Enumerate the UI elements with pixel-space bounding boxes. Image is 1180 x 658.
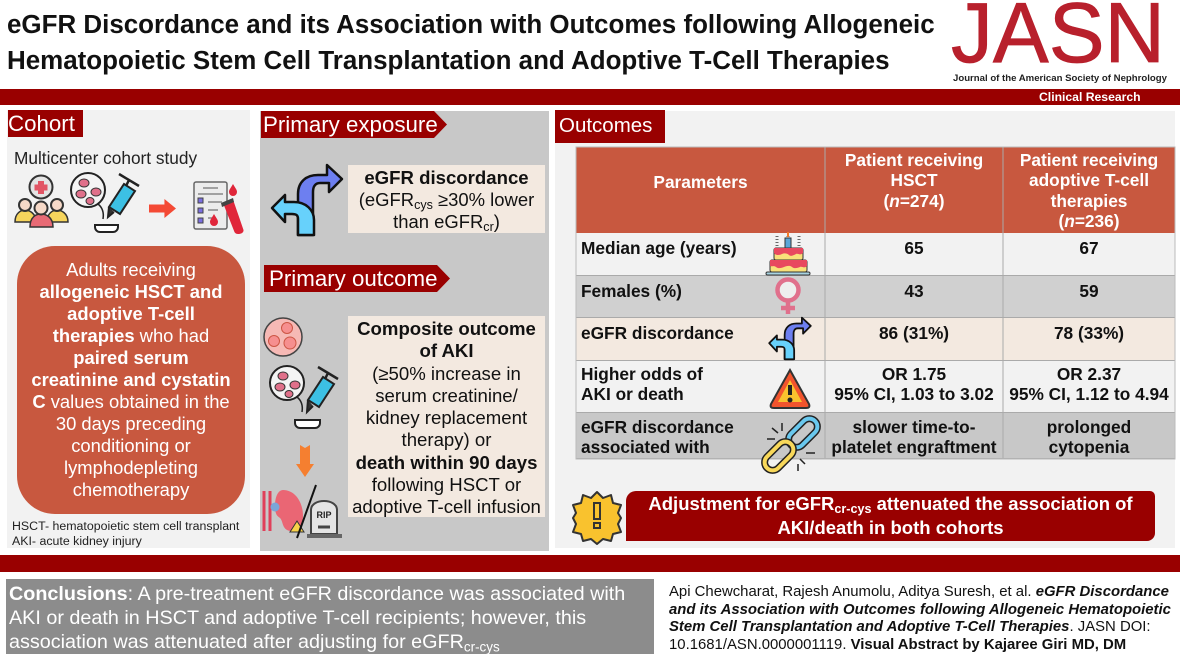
callout: eligibility: chemotherapy xyxy=(73,479,189,500)
text box: composite outcome: of AKI xyxy=(419,340,474,361)
arrow: cohort to labs xyxy=(149,199,176,218)
row: higher odds: 95% CI, 1.03 to 3.02 xyxy=(834,384,994,404)
row: higher odds: 95% CI, 1.12 to 4.94 xyxy=(1009,384,1169,404)
row: associated with: platelet engraftment xyxy=(831,437,997,457)
citation: and its Association with Outcomes following Allogeneic Hematopoietic xyxy=(669,602,1171,618)
heading: primary exposure: Primary exposure xyxy=(263,112,438,137)
icon: cells and syringe xyxy=(70,172,140,233)
row: associated with: prolonged xyxy=(1047,417,1131,437)
table header: Patient receiving xyxy=(1020,150,1158,170)
icon: diverging arrows small xyxy=(768,316,812,360)
row: associated with: eGFR discordance xyxy=(581,417,734,437)
text box: composite outcome: serum creatinine/ xyxy=(375,385,518,406)
row: eGFR discordance: 78 (33%) xyxy=(1054,323,1124,343)
table header: HSCT xyxy=(890,170,938,190)
text box: composite outcome: following HSCT or xyxy=(372,474,521,495)
text box: eGFR discordance: eGFR discordance xyxy=(364,167,529,188)
row: associated with: slower time-to- xyxy=(853,417,975,437)
citation: Api Chewcharat, Rajesh Anumolu, Aditya Suresh, et al. eGFR Discordance xyxy=(669,584,1169,600)
callout: eligibility: C values obtained in the xyxy=(32,391,230,412)
callout: adjustment finding xyxy=(626,491,1155,541)
table header: adoptive T-cell xyxy=(1029,170,1149,190)
conclusions: AKI or death in HSCT and adoptive T-cell recipients; however, this xyxy=(9,607,586,629)
text box: composite outcome: (≥50% increase in xyxy=(372,363,521,384)
row: associated with: associated with xyxy=(581,437,710,457)
callout: eligibility: therapies who had xyxy=(53,325,209,346)
citation: Stem Cell Transplantation and Adoptive T-Cell Therapies. JASN DOI: xyxy=(669,619,1151,635)
title: eGFR Discordance and its Association with Outcomes following Allogeneic xyxy=(7,11,935,39)
row: median age: 65 xyxy=(904,238,924,258)
row: females: 43 xyxy=(904,281,924,301)
row: associated with: cytopenia xyxy=(1049,437,1129,457)
text box: eGFR discordance xyxy=(348,165,545,233)
icon: female symbol xyxy=(775,277,801,314)
panel: exposure and outcome xyxy=(260,111,549,551)
heading: outcomes xyxy=(555,110,665,143)
icon: birthday cake xyxy=(766,232,810,276)
heading: primary outcome: Primary outcome xyxy=(269,266,438,291)
logo: JASN: Journal of the American Society of Nephrology xyxy=(953,73,1167,84)
icon: diverging arrows xyxy=(270,164,344,236)
table: outcomes xyxy=(576,146,1176,460)
callout: eligibility: creatinine and cystatin xyxy=(31,369,231,390)
conclusions: Conclusions: A pre-treatment eGFR discordance was associated with xyxy=(9,583,625,605)
citation: 10.1681/ASN.0000001119. Visual Abstract by Kajaree Giri MD, DM xyxy=(669,636,1126,652)
icon: cell xyxy=(263,317,303,357)
table header: (n=274) xyxy=(883,191,944,211)
bottom banner xyxy=(0,555,1180,572)
abbreviations xyxy=(12,519,240,548)
abbreviations: HSCT- hematopoietic stem cell transplant xyxy=(12,519,239,533)
table header: therapies xyxy=(1051,191,1127,211)
column dividers xyxy=(576,146,1176,460)
abbreviations: AKI- acute kidney injury xyxy=(12,534,142,548)
icon: kidney or death: RIP xyxy=(316,510,332,520)
row: females xyxy=(576,276,1175,318)
conclusions xyxy=(6,579,654,654)
callout: eligibility: allogeneic HSCT and xyxy=(40,281,222,302)
text box: composite outcome: Composite outcome xyxy=(357,318,536,339)
row: higher odds: AKI or death xyxy=(581,384,684,404)
callout: eligibility xyxy=(17,246,245,514)
callout: eligibility: adoptive T-cell xyxy=(67,303,195,324)
text box: eGFR discordance: than eGFRcr) xyxy=(393,211,500,234)
table header xyxy=(576,147,1175,233)
text box: eGFR discordance: (eGFRcys ≥30% lower xyxy=(359,189,534,212)
top banner: Clinical Research xyxy=(1039,90,1141,104)
study type text: Multicenter cohort study xyxy=(14,148,197,168)
row: females: Females (%) xyxy=(581,281,682,301)
callout: eligibility: lymphodepleting xyxy=(64,457,198,478)
row: higher odds: OR 1.75 xyxy=(882,364,946,384)
icon: patients xyxy=(14,174,69,228)
table header: Patient receiving xyxy=(845,150,983,170)
row: higher odds: Higher odds of xyxy=(581,364,703,384)
heading: outcomes: Outcomes xyxy=(559,114,652,137)
row: median age: 67 xyxy=(1079,238,1099,258)
panel: cohort xyxy=(7,110,250,548)
icon: warning triangle xyxy=(770,368,810,409)
icon: kidney or death xyxy=(262,484,342,538)
table header: Parameters xyxy=(653,172,748,192)
title xyxy=(7,11,935,75)
row: eGFR discordance xyxy=(576,318,1175,361)
citation xyxy=(669,584,1171,652)
row: females: 59 xyxy=(1079,281,1099,301)
callout: eligibility: paired serum xyxy=(73,347,189,368)
table header: (n=236) xyxy=(1058,211,1120,231)
panel: outcomes xyxy=(555,111,1175,548)
callout: eligibility: conditioning or xyxy=(71,435,191,456)
text box: composite outcome xyxy=(348,316,545,517)
icon: chain link xyxy=(761,415,821,474)
row: higher odds: OR 2.37 xyxy=(1057,364,1121,384)
icon: lab report and blood tube xyxy=(193,181,244,234)
conclusions: association was attenuated after adjusting for eGFRcr-cys xyxy=(9,631,500,654)
heading: cohort: Cohort xyxy=(8,111,75,136)
callout: eligibility: 30 days preceding xyxy=(56,413,206,434)
icon: cells and syringe xyxy=(269,365,339,429)
callout: eligibility: Adults receiving xyxy=(66,259,196,280)
arrow: down xyxy=(296,445,314,477)
row: higher odds xyxy=(576,361,1175,413)
top banner xyxy=(0,89,1180,105)
text box: composite outcome: death within 90 days xyxy=(356,452,537,473)
callout: adjustment finding: AKI/death in both cohorts xyxy=(777,517,1004,538)
callout: adjustment finding: Adjustment for eGFRcr-cys attenuated the association of xyxy=(648,493,1133,516)
icon: alert badge xyxy=(572,491,622,545)
row: eGFR discordance: eGFR discordance xyxy=(581,323,734,343)
text box: composite outcome: therapy) or xyxy=(402,429,491,450)
row: median age: Median age (years) xyxy=(581,238,737,258)
row: eGFR discordance: 86 (31%) xyxy=(879,323,949,343)
text box: composite outcome: adoptive T-cell infusion xyxy=(352,496,541,517)
title: Hematopoietic Stem Cell Transplantation and Adoptive T-Cell Therapies xyxy=(7,47,890,75)
row: median age xyxy=(576,233,1175,276)
text box: composite outcome: kidney replacement xyxy=(366,407,527,428)
row: associated with xyxy=(576,413,1175,459)
